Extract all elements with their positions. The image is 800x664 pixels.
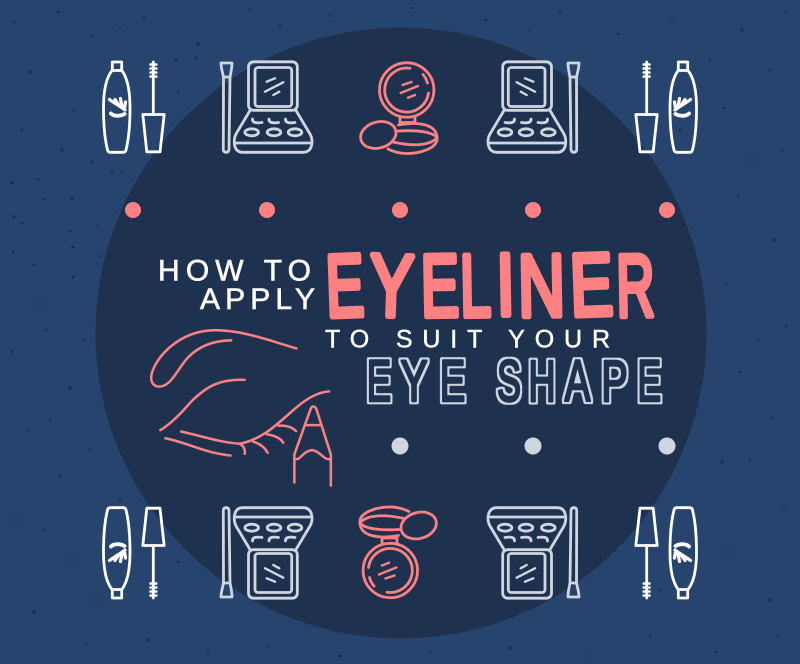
- icon: brush and eyeshadow palette, top left: [221, 62, 312, 152]
- title: eyeliner: E: [568, 235, 615, 335]
- eyeliner pencil: [294, 406, 331, 486]
- title: eye shape outline lettering: P: [601, 348, 628, 414]
- bottom row of grey dots: [392, 438, 676, 454]
- title: eye shape outline lettering: [367, 348, 661, 414]
- title: to suit your: TO SUIT YOUR: [325, 326, 610, 354]
- title: eyeliner: I: [495, 237, 516, 334]
- icon: powder compact, bottom: [360, 507, 440, 598]
- title: how to apply: [158, 254, 315, 316]
- upper lash line: [181, 391, 329, 444]
- title: eyeliner: R: [616, 237, 655, 336]
- title: eyeliner: [324, 235, 655, 336]
- icon: mascara, top left: [104, 62, 164, 152]
- title: eye shape outline lettering: A: [565, 350, 590, 414]
- title: eye shape outline lettering: E: [367, 350, 391, 414]
- title: eye shape outline lettering: E: [637, 350, 661, 414]
- lashes: [240, 426, 296, 454]
- title: eye shape outline lettering: H: [528, 350, 556, 414]
- icon: brush and eyeshadow palette, bottom left: [221, 508, 312, 598]
- title: eyeliner: E: [420, 236, 460, 335]
- icon: mascara, bottom left: [104, 508, 164, 598]
- icon: brush and eyeshadow palette, bottom right: [488, 508, 579, 598]
- title: how to apply: APPLY: [200, 283, 315, 316]
- title: eye shape outline lettering: S: [497, 349, 521, 414]
- lower lash line: [165, 438, 231, 456]
- icon: mascara, bottom right: [636, 508, 696, 598]
- title: eyeliner: Y: [368, 237, 415, 336]
- title: how to apply: HOW TO: [158, 254, 311, 288]
- icon: powder compact, top: [357, 63, 437, 154]
- title: eyeliner: N: [517, 237, 566, 336]
- title: eye shape outline lettering: E: [440, 350, 465, 414]
- eyebrow: [151, 330, 296, 387]
- icon: mascara, top right: [636, 62, 696, 152]
- icon: brush and eyeshadow palette, top right: [488, 62, 579, 152]
- title: eyeliner: E: [324, 236, 366, 336]
- top row of coral dots: [125, 202, 675, 218]
- title: eye shape outline lettering: Y: [400, 349, 428, 414]
- title: eyeliner: L: [459, 236, 492, 335]
- icon: eye with eyebrow and eyeliner pencil: [151, 330, 331, 486]
- central dark circle: [96, 28, 706, 638]
- eyelid crease: [160, 380, 245, 430]
